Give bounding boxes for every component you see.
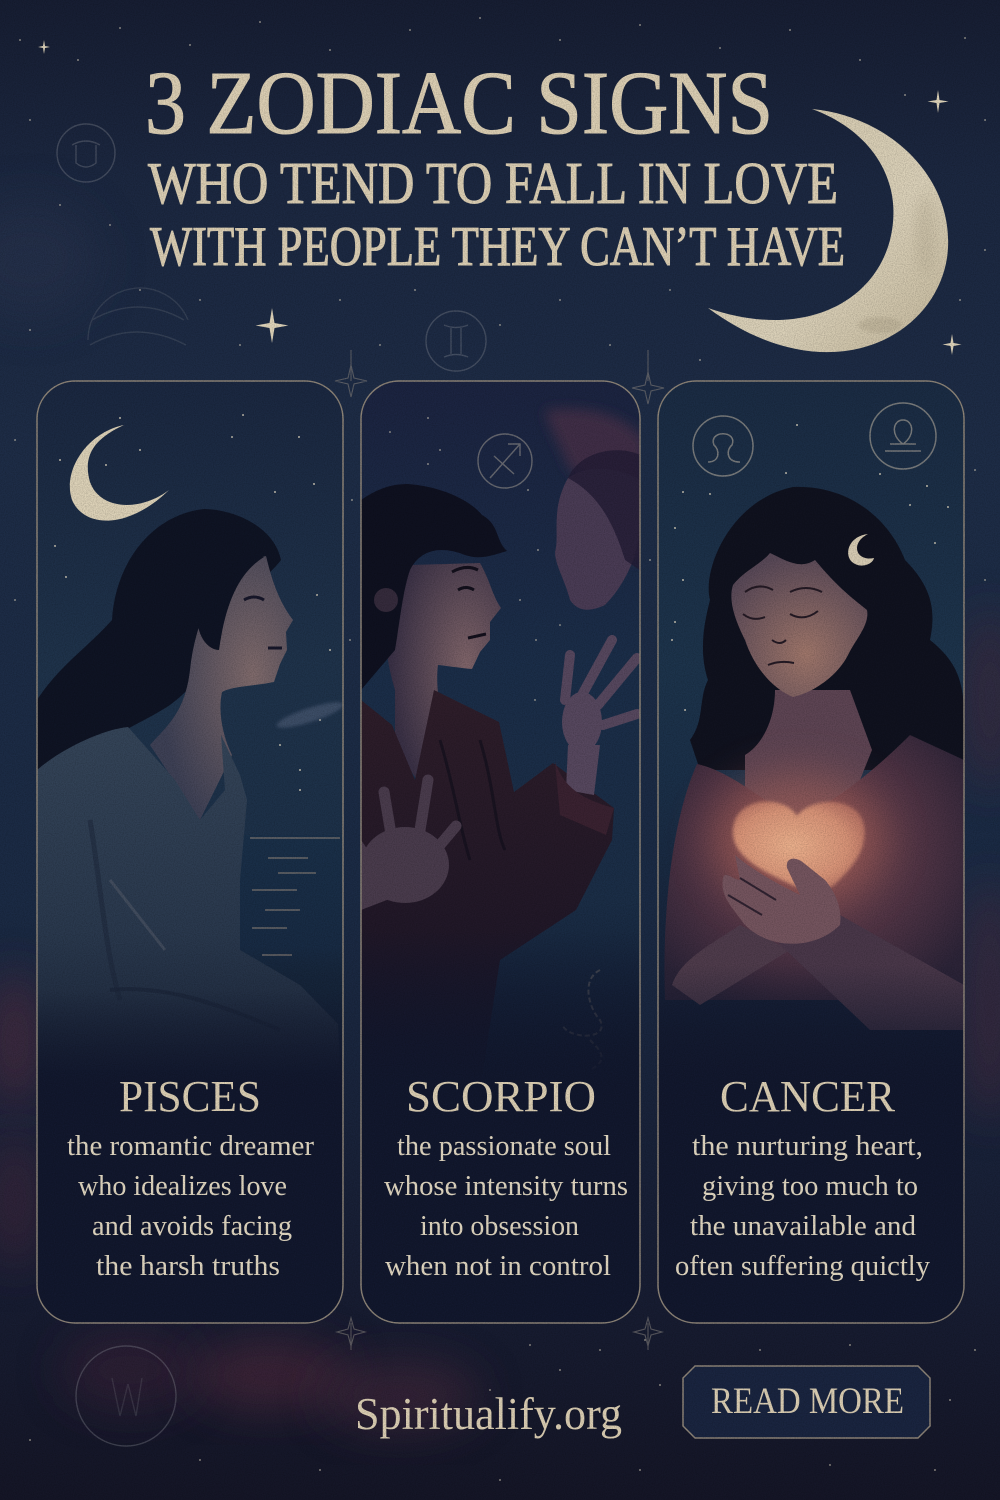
eyes and mouth [743, 586, 822, 665]
website name: Spiritualify.org [355, 1389, 622, 1439]
sea [250, 837, 340, 956]
description: pisces: who idealizes love [78, 1170, 287, 1202]
title: WHO TEND TO FALL IN LOVE [148, 150, 838, 216]
forearms [672, 925, 790, 1005]
small moon [70, 425, 169, 521]
description: cancer: the unavailable and [690, 1210, 916, 1242]
title: WITH PEOPLE THEY CAN’T HAVE [150, 216, 845, 278]
description: pisces: and avoids facing [92, 1210, 292, 1242]
title: 3 ZODIAC SIGNS [145, 54, 773, 153]
description: cancer: the nurturing heart, [692, 1130, 923, 1162]
heading: cancer: CANCER [720, 1072, 896, 1121]
description: cancer [675, 1130, 930, 1282]
glow [713, 775, 883, 905]
description: pisces: the romantic dreamer [67, 1130, 314, 1162]
read more button [683, 1366, 930, 1438]
chest hand [361, 780, 456, 910]
other figure face [555, 476, 632, 610]
read more button: READ MORE [711, 1381, 904, 1422]
heading: pisces: PISCES [119, 1072, 261, 1121]
description: scorpio [384, 1130, 628, 1282]
shirt [38, 727, 333, 1020]
stars [390, 418, 560, 700]
description: scorpio: the passionate soul [397, 1130, 611, 1162]
zodiac icon: scorpion tail [562, 970, 602, 1070]
man hair [361, 484, 507, 690]
crescent moon [708, 109, 948, 352]
panel connector ornaments [335, 350, 664, 1350]
neck and chest [745, 690, 872, 820]
zodiac icon: leo [693, 416, 753, 476]
zodiac icon: sagittarius [478, 434, 532, 488]
description: scorpio: whose intensity turns [384, 1170, 628, 1202]
facial features [244, 597, 282, 648]
zodiac icon: libra [870, 403, 936, 469]
description: scorpio: into obsession [420, 1210, 579, 1242]
description: pisces [67, 1130, 314, 1282]
milky cloud [276, 702, 342, 728]
stars [672, 425, 948, 710]
raised hand [562, 640, 637, 795]
panel: cancer [658, 381, 964, 1323]
description: cancer: often suffering quictly [675, 1250, 930, 1282]
purple hair [544, 405, 640, 474]
face and neck [150, 556, 293, 820]
face [731, 553, 867, 697]
panel: pisces [37, 381, 345, 1323]
heading: scorpio: SCORPIO [406, 1072, 596, 1121]
sparkle stars [38, 40, 962, 355]
hair [690, 487, 964, 770]
man neck and face [385, 563, 501, 790]
faint zodiac emblems in the background [57, 124, 486, 1446]
night sky stars [55, 415, 330, 790]
hair [37, 509, 281, 780]
glowing heart [733, 801, 865, 890]
man shirt [362, 690, 614, 1011]
hair clip moon [848, 534, 874, 566]
man facial features [452, 567, 486, 638]
title [145, 54, 845, 278]
description: scorpio: when not in control [385, 1250, 611, 1282]
description: cancer: giving too much to [702, 1170, 918, 1202]
description: pisces: the harsh truths [96, 1250, 280, 1282]
shirt [664, 735, 964, 1000]
hands [722, 855, 840, 944]
panel: scorpio [361, 381, 645, 1323]
